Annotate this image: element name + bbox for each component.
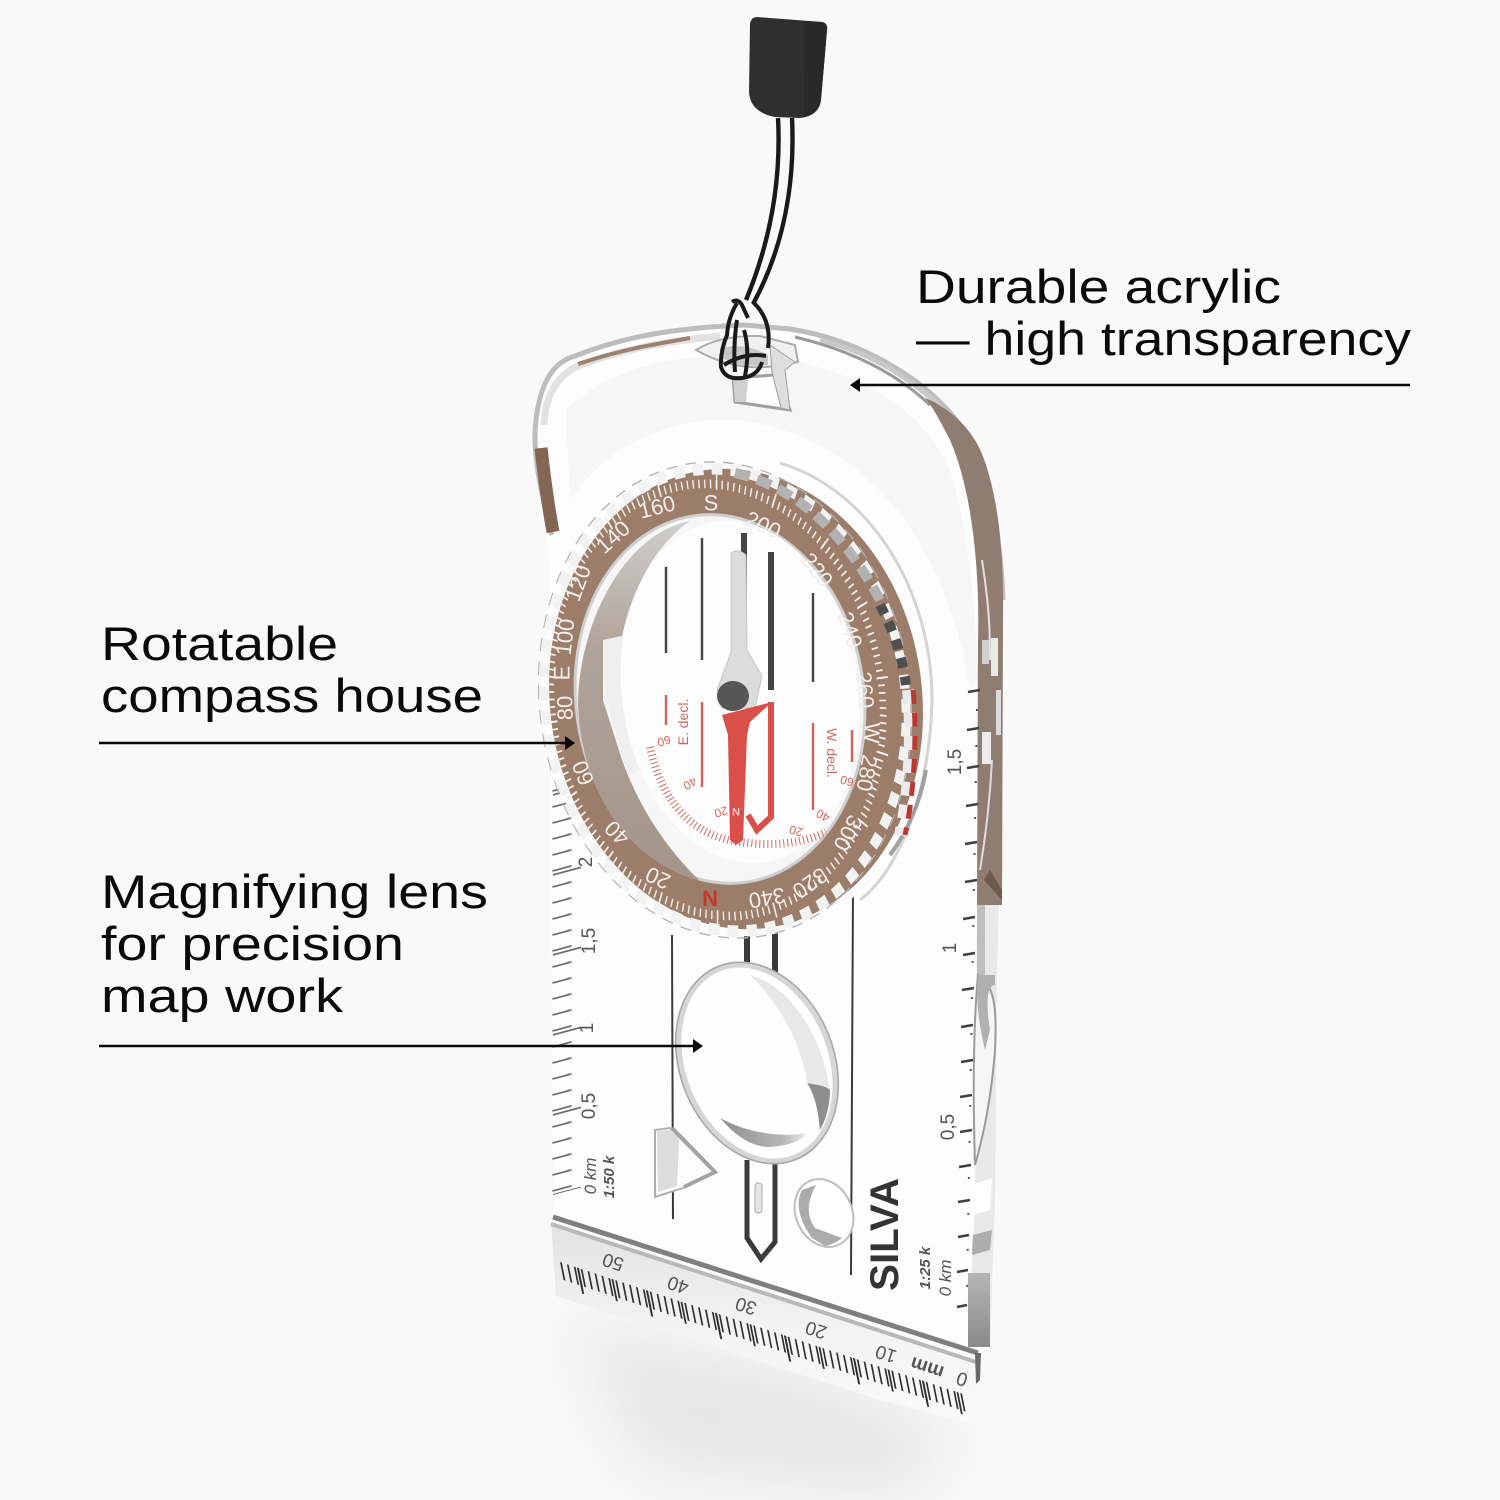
bezel numbers	[550, 490, 885, 913]
declination scale	[650, 747, 826, 844]
heading: Durable acrylic	[916, 260, 1281, 313]
left ruler labels: 1:50 k	[601, 1155, 618, 1198]
bezel numbers: 120	[560, 561, 596, 605]
top right rim lines	[795, 337, 930, 405]
bezel numbers: 340	[747, 883, 787, 913]
right ruler labels: 1	[940, 943, 961, 953]
cord loop	[721, 301, 769, 378]
bezel numbers: N	[702, 886, 718, 910]
brown bezel	[520, 444, 952, 954]
declination labels: 20	[787, 822, 804, 839]
glass strip	[603, 636, 640, 775]
plate body	[535, 325, 1003, 1362]
right ruler	[917, 690, 980, 1307]
needle N: N	[732, 805, 740, 817]
meridian lines	[666, 533, 852, 810]
dark teeth	[880, 605, 906, 685]
bezel numbers: E	[550, 666, 574, 680]
bezel numbers: 320	[788, 862, 832, 904]
compass: black tag	[749, 17, 827, 118]
cord upper	[746, 118, 793, 304]
round hole	[784, 1169, 864, 1257]
callout: compass house	[99, 617, 575, 750]
bezel numbers: W	[859, 722, 885, 744]
declination labels: W. decl.	[824, 728, 840, 778]
grey left wall	[578, 521, 700, 881]
declination labels: 20	[712, 803, 729, 820]
SILVA logo: SILVA	[863, 1178, 907, 1291]
triangle cutout	[655, 1128, 715, 1197]
slot	[755, 1183, 762, 1213]
mm labels: 30	[733, 1292, 760, 1318]
right glass edge	[968, 905, 999, 1347]
bezel numbers: 160	[636, 490, 678, 524]
bezel numbers: 40	[600, 816, 634, 850]
orienting lines below compass	[672, 890, 853, 1275]
dial face	[599, 505, 881, 879]
heading: — high transparency	[916, 312, 1412, 365]
heading: for precision	[101, 917, 404, 970]
inner window	[552, 496, 888, 902]
heading	[101, 865, 488, 1022]
declination labels: 60	[655, 732, 672, 749]
tip	[975, 1353, 981, 1384]
heading: map work	[101, 969, 344, 1022]
red and white teeth	[900, 690, 910, 835]
mm labels: 20	[803, 1316, 830, 1342]
brown rim left	[541, 448, 553, 532]
callout: durable acrylic	[850, 260, 1412, 392]
declination labels	[655, 699, 855, 839]
right ruler labels	[917, 749, 966, 1296]
mm labels: 10	[873, 1340, 900, 1366]
bezel numbers: 140	[591, 515, 635, 559]
needle red end	[722, 702, 772, 845]
right ruler labels: 1:25 k	[917, 1246, 934, 1289]
major ticks	[521, 460, 913, 940]
mm labels: 0	[954, 1367, 971, 1390]
lens shaded sector	[750, 975, 829, 1090]
band edge	[553, 1217, 978, 1353]
bezel numbers: 80	[552, 695, 578, 721]
left ruler labels: 1	[577, 1023, 598, 1033]
bezel numbers: 60	[567, 757, 599, 789]
bezel numbers: 220	[796, 548, 838, 592]
bezel numbers: 200	[741, 506, 785, 544]
right ruler labels: 0 km	[936, 1260, 955, 1296]
declination labels: 60	[838, 772, 855, 789]
heading: Magnifying lens	[101, 865, 488, 918]
plate shading halo	[566, 355, 978, 690]
lanyard clip	[696, 336, 798, 410]
lens dark crescent	[720, 1118, 807, 1147]
callout: magnifying lens	[99, 865, 703, 1053]
left ruler	[562, 786, 618, 1198]
mm labels: 50	[600, 1248, 627, 1274]
left ruler labels: 0,5	[579, 1093, 600, 1119]
rotatable compass house	[508, 436, 963, 962]
arrow	[99, 736, 575, 750]
bezel numbers: 20	[642, 861, 674, 895]
needle white end	[717, 551, 762, 708]
arrow	[99, 1039, 703, 1053]
right ruler labels: 1,5	[945, 749, 966, 775]
orienting arrow	[748, 702, 771, 830]
arrow	[850, 378, 1410, 392]
declination labels: 40	[813, 806, 832, 825]
mm ticks	[562, 1271, 968, 1408]
compass: transparent base plate	[535, 301, 1003, 1362]
left ruler labels: 0 km	[581, 1158, 600, 1194]
pivot	[717, 681, 749, 711]
bezel numbers: 280	[852, 753, 882, 793]
declination labels: E. decl.	[675, 699, 691, 745]
left ruler labels	[576, 857, 618, 1198]
bezel numbers: 100	[551, 617, 579, 657]
bezel teeth	[514, 445, 936, 955]
left ruler labels: 2	[576, 857, 597, 867]
bottom mm ruler band	[551, 1217, 981, 1425]
mm labels: mm	[908, 1352, 947, 1382]
right band highlights	[980, 560, 1002, 900]
bezel numbers: 300	[828, 811, 868, 855]
magnifying lens	[647, 938, 867, 1188]
floor shadow	[570, 1320, 960, 1500]
heading	[101, 617, 483, 722]
mm labels: 40	[665, 1271, 692, 1297]
heading: Rotatable	[101, 617, 338, 670]
bezel numbers: S	[704, 490, 718, 516]
plate rim	[535, 325, 1003, 600]
outer clear rim	[511, 436, 963, 962]
bezel numbers: 240	[832, 609, 868, 651]
grey teeth top right	[735, 473, 880, 600]
fine ticks	[523, 462, 911, 938]
heading	[916, 260, 1412, 365]
bezel numbers: 260	[851, 671, 879, 709]
right brown edge band	[925, 398, 1003, 905]
heading: compass house	[101, 669, 483, 722]
right ruler labels: 0,5	[938, 1114, 959, 1140]
lens rim highlight	[647, 938, 867, 1188]
left ruler labels: 1,5	[579, 928, 600, 954]
mm labels	[600, 1248, 971, 1390]
declination labels: 40	[680, 774, 699, 793]
